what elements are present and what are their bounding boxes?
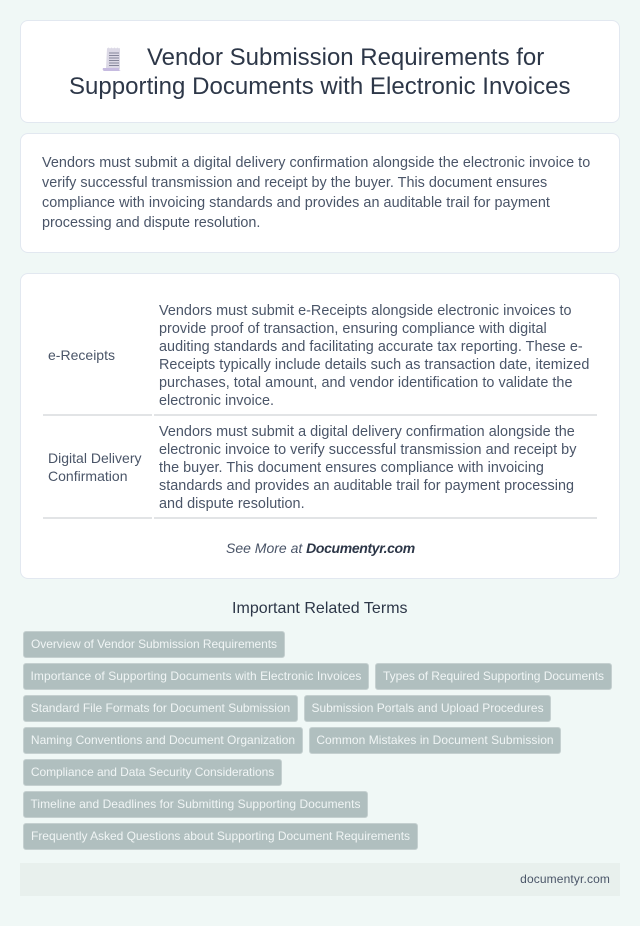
description: Digital Delivery Confirmation [159,424,576,512]
label: Digital Delivery Confirmation: Digital Delivery [48,450,142,466]
table row: e-Receipts [48,303,589,409]
description: Digital Delivery Confirmation: the buyer. This document ensures compliance with invoicing [159,460,544,476]
tag [23,823,418,850]
tag: Timeline and Deadlines for Submitting Supporting Documents [30,797,361,811]
description: e-Receipts [159,303,589,409]
intro text: compliance with invoicing standards and provides an auditable trail for payment [42,195,550,211]
tag [23,791,368,818]
tag [309,727,561,754]
intro panel [20,133,620,253]
related terms tags [23,631,612,850]
description: Digital Delivery Confirmation: standards and provides an auditable trail for payment processing [159,478,574,494]
footer text: documentyr.com [520,872,610,886]
description: e-Receipts: Vendors must submit e-Receipts alongside electronic invoices to [159,303,572,319]
tag [304,695,551,722]
see more link: See More at Documentyr.com [226,540,415,556]
intro text: verify successful transmission and receipt by the buyer. This document ensures [42,175,547,191]
intro text: processing and dispute resolution. [42,215,260,231]
description: Digital Delivery Confirmation: electronic invoice to verify successful transmission and receipt by [159,442,576,458]
title [69,44,571,100]
label: Digital Delivery Confirmation: Confirmation [48,468,128,484]
tag: Naming Conventions and Document Organization [31,733,295,747]
tag: Common Mistakes in Document Submission [316,733,554,747]
description: Digital Delivery Confirmation: and dispute resolution. [159,496,305,512]
tag [23,759,282,786]
description: e-Receipts: auditing standards and facilitating accurate tax reporting. These e- [159,339,583,355]
tag [23,631,285,658]
tag: Importance of Supporting Documents with Electronic Invoices [31,669,361,683]
tag [23,727,303,754]
description: e-Receipts: purchases, total amount, and vendor identification to validate the [159,375,573,391]
footer bar [20,863,620,896]
title: Vendor Submission Requirements for [147,44,544,71]
related terms heading: Important Related Terms [232,600,408,617]
tag: Types of Required Supporting Documents [383,669,604,683]
intro text: Vendors must submit a digital delivery confirmation alongside the electronic invoice to [42,155,590,171]
table row: Digital Delivery Confirmation [48,424,576,512]
description: Digital Delivery Confirmation: Vendors must submit a digital delivery confirmation alongside the [159,424,575,440]
title: Supporting Documents with Electronic Invoices [69,73,571,100]
intro text [42,155,590,231]
label: e-Receipts: e-Receipts [48,347,115,363]
tag: Overview of Vendor Submission Requirements [31,637,277,651]
tag: Frequently Asked Questions about Supporting Document Requirements [31,829,410,843]
tag [23,663,369,690]
description: e-Receipts: Receipts typically include details such as transaction date, itemized [159,357,589,373]
tag [375,663,612,690]
icon: document receipt [102,48,121,71]
header panel [20,20,620,123]
tag: Submission Portals and Upload Procedures [311,701,544,715]
description: e-Receipts: provide proof of transaction, ensuring compliance with digital [159,321,547,337]
tag [23,695,298,722]
tag: Compliance and Data Security Considerations [31,765,274,779]
table panel [20,273,620,579]
label: Digital Delivery Confirmation [48,450,142,484]
description: e-Receipts: electronic invoice. [159,393,274,409]
tag: Standard File Formats for Document Submission [31,701,290,715]
